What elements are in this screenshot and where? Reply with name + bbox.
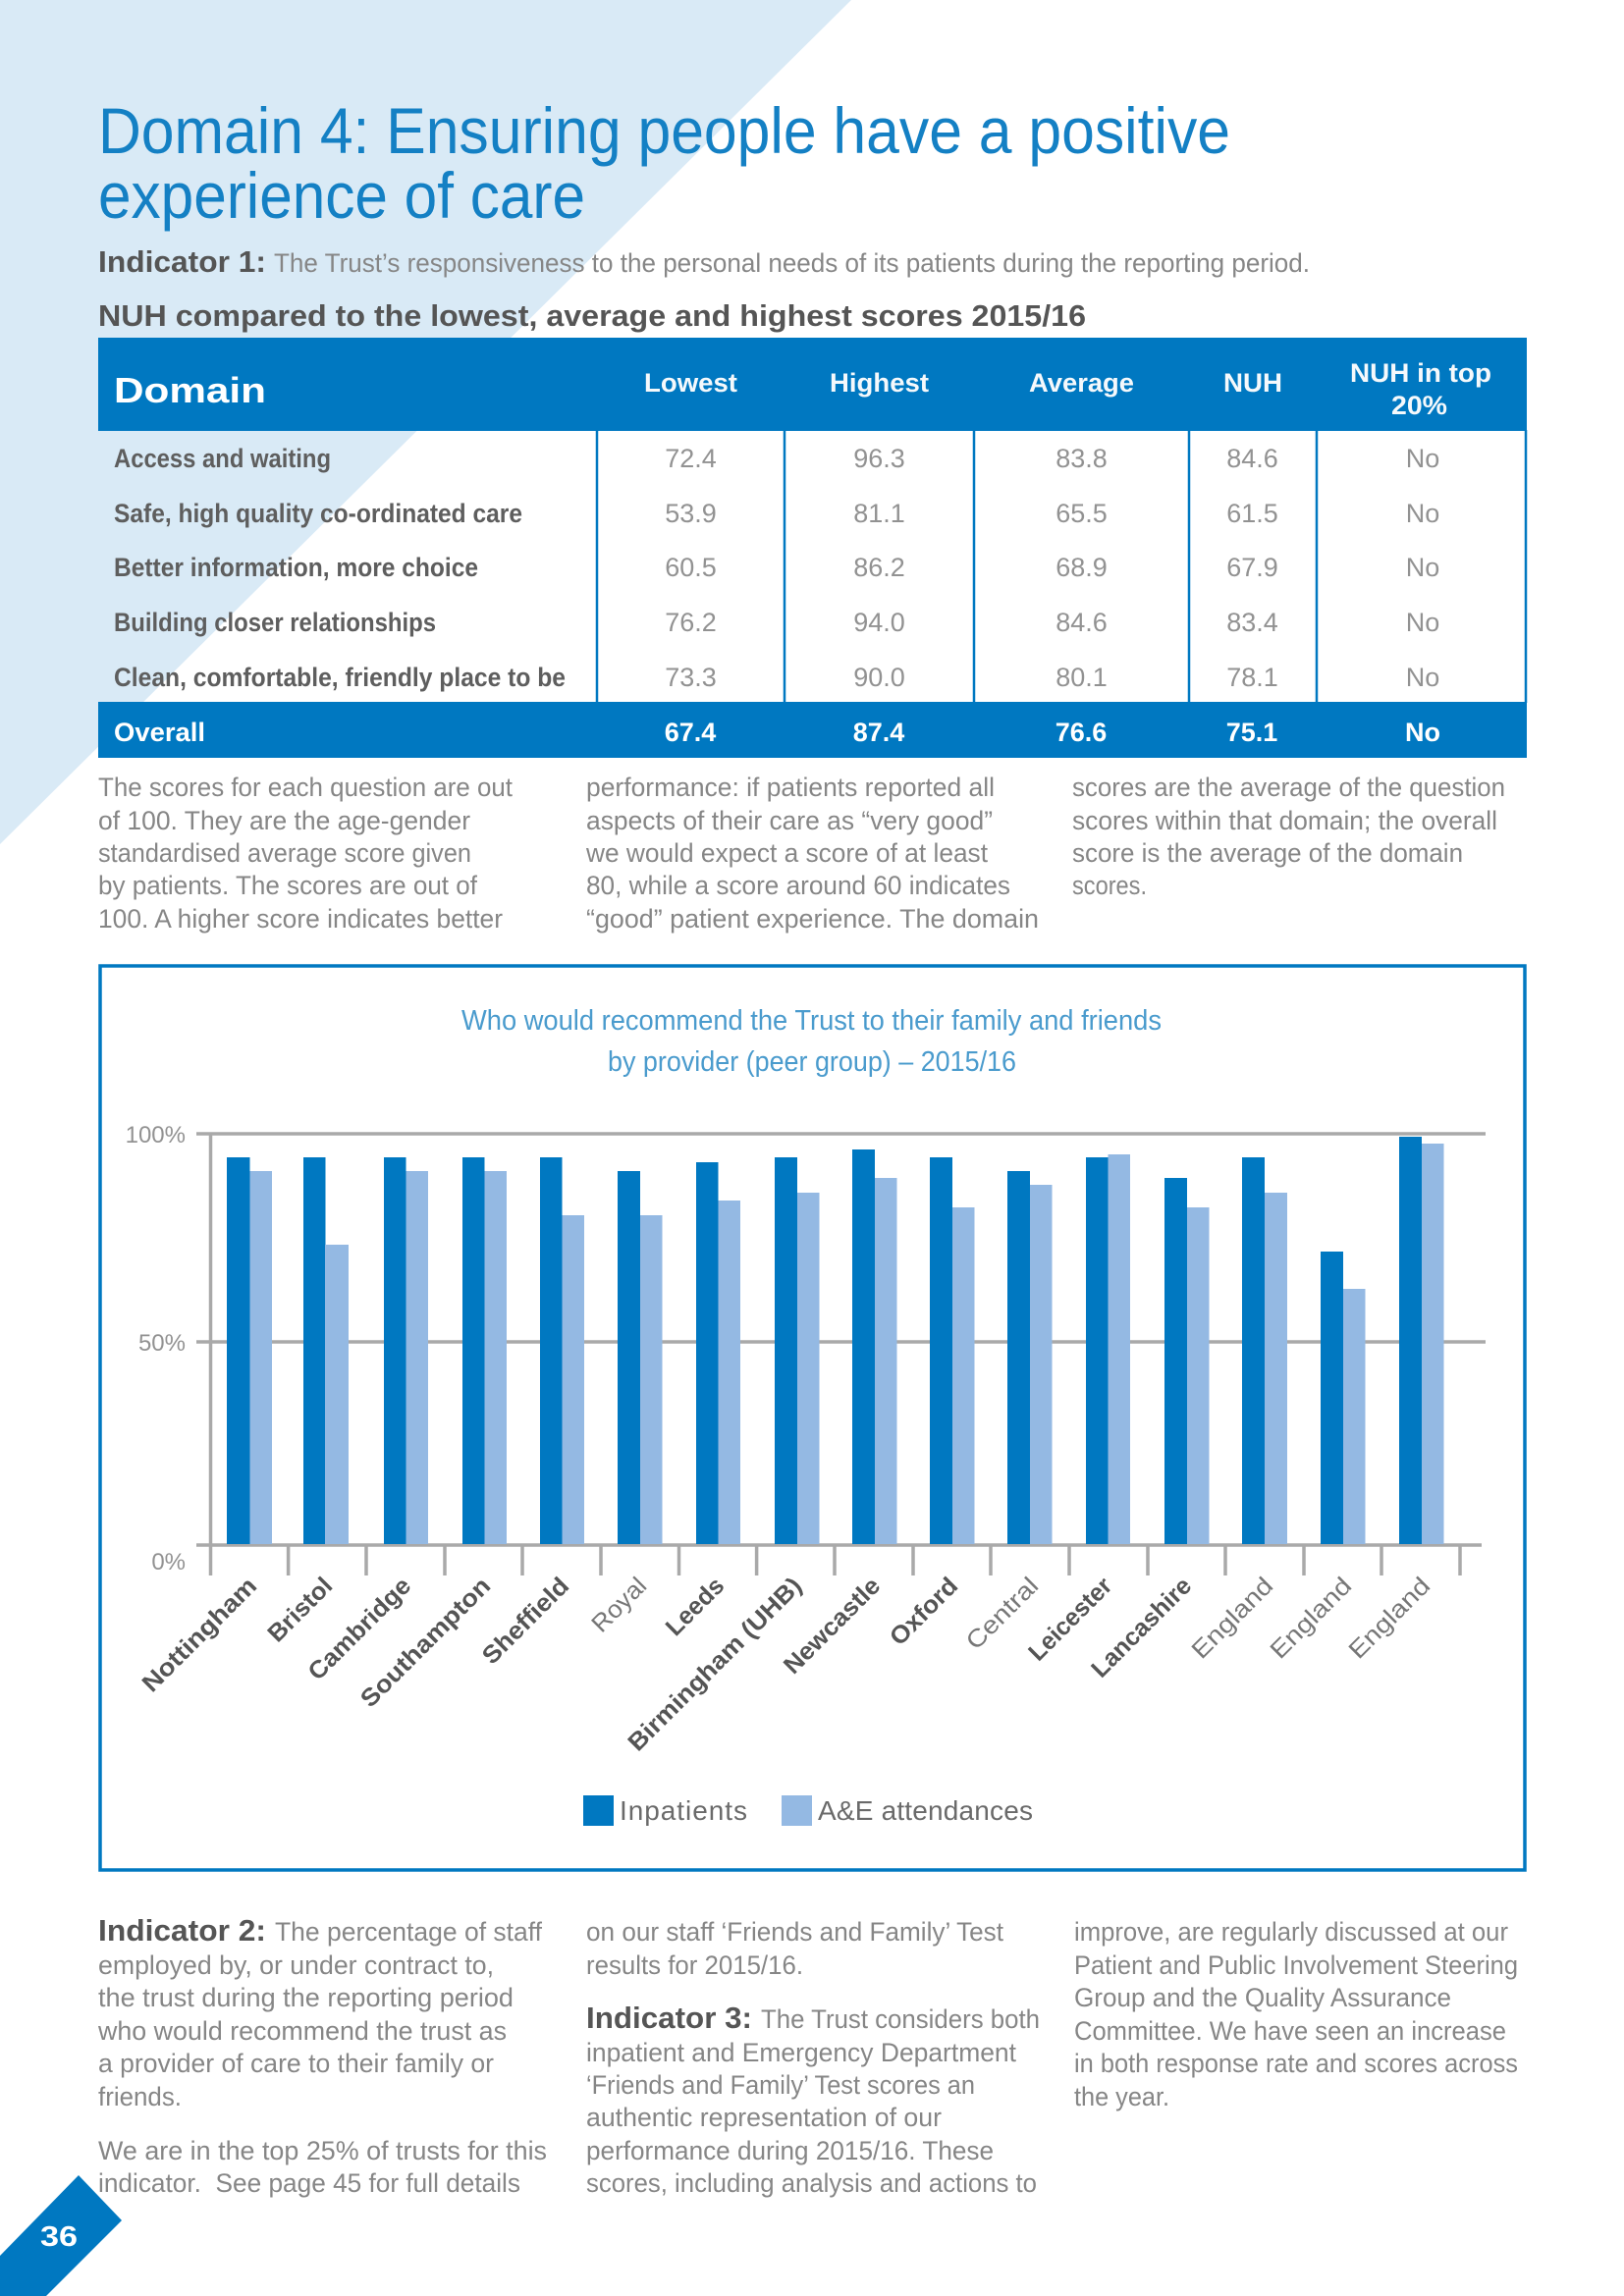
table	[98, 338, 1527, 758]
table column lines	[597, 430, 1526, 703]
table header row: 20%	[1391, 391, 1447, 420]
page number tag: 36	[40, 2221, 78, 2253]
x axis labels: Lancashire	[1086, 1572, 1197, 1683]
row: building closer relationships: 84.6	[1056, 608, 1108, 637]
table header row: Average	[1029, 368, 1134, 398]
table notes column 1: 100. A higher score indicates better	[98, 904, 503, 934]
indicator 1 text: Indicator 1:	[98, 244, 266, 279]
indicator 3 text: Indicator 3:	[586, 2001, 752, 2035]
table header row	[98, 338, 1527, 431]
row: better information: Better information, more choice	[114, 553, 478, 582]
title: Domain 4: Ensuring people have a positive	[98, 94, 1230, 167]
row: overall	[98, 702, 1527, 758]
row: building closer relationships: No	[1406, 608, 1439, 637]
row: clean, comfortable	[114, 663, 1439, 692]
x axis labels: Newcastle	[779, 1572, 886, 1680]
indicator 3 text: ‘Friends and Family’ Test scores an	[586, 2070, 975, 2100]
x axis labels: Leicester	[1023, 1572, 1117, 1667]
row: safe, high quality care: No	[1406, 499, 1439, 528]
table notes column 2: aspects of their care as “very good”	[586, 806, 993, 835]
x axis labels: Central	[960, 1572, 1044, 1655]
indicator 3 continued: Committee. We have seen an increase	[1074, 2016, 1506, 2046]
chart title	[461, 1005, 1162, 1078]
x axis labels: England	[1265, 1572, 1357, 1664]
row: access and waiting: No	[1406, 444, 1439, 473]
table notes column 1: by patients. The scores are out of	[98, 871, 477, 900]
table notes column 2: “good” patient experience. The domain	[586, 904, 1039, 934]
indicator 2 text	[97, 1913, 547, 2198]
x axis labels	[136, 1572, 1435, 1757]
indicator 3 continued: improve, are regularly discussed at our	[1074, 1917, 1508, 1947]
indicator 3 continued: in both response rate and scores across	[1074, 2049, 1518, 2078]
row: access and waiting: 96.3	[853, 444, 905, 473]
row: access and waiting: Access and waiting	[114, 444, 331, 473]
indicator 3 continued: the year.	[1074, 2082, 1169, 2111]
y axis labels: 0%	[151, 1549, 186, 1575]
x axis labels: England	[1343, 1572, 1435, 1664]
table header row: Highest	[830, 368, 929, 398]
row: better information: 86.2	[853, 553, 905, 582]
chart frame	[100, 966, 1525, 1870]
row: better information: No	[1406, 553, 1439, 582]
chart axes and gridlines	[196, 1134, 1486, 1575]
y axis labels: 100%	[126, 1122, 186, 1148]
chart title: Who would recommend the Trust to their family and friends	[461, 1005, 1162, 1037]
row: building closer relationships: 83.4	[1226, 608, 1278, 637]
row: access and waiting: 72.4	[665, 444, 717, 473]
row: safe, high quality care: 61.5	[1226, 499, 1278, 528]
indicator 2 text: indicator. See page 45 for full details	[98, 2168, 520, 2198]
table notes column 3	[1072, 773, 1505, 900]
legend	[583, 1795, 1033, 1826]
indicator 3 text: inpatient and Emergency Department	[586, 2038, 1016, 2067]
x axis labels: Bristol	[262, 1572, 338, 1648]
table notes column 2: we would expect a score of at least	[585, 838, 988, 868]
row: clean, comfortable: No	[1406, 663, 1439, 692]
row: building closer relationships: 76.2	[665, 608, 717, 637]
x axis labels: Birmingham (UHB)	[623, 1572, 807, 1757]
table notes column 2	[585, 773, 1039, 934]
row: overall: 67.4	[665, 718, 716, 747]
indicator 3 text: authentic representation of our	[586, 2103, 942, 2132]
row: safe, high quality care: 53.9	[665, 499, 717, 528]
table notes column 3: score is the average of the domain	[1072, 838, 1463, 868]
indicator 3 text: performance during 2015/16. These	[586, 2136, 994, 2165]
row: overall: No	[1405, 718, 1440, 747]
indicator 2 text: friends.	[98, 2082, 182, 2111]
x axis labels: Royal	[586, 1572, 652, 1638]
row: better information: 67.9	[1226, 553, 1278, 582]
row: building closer relationships: 94.0	[853, 608, 905, 637]
chart title: by provider (peer group) – 2015/16	[608, 1046, 1016, 1078]
indicator 2 text: the trust during the reporting period	[98, 1983, 514, 2012]
table notes column 1	[98, 773, 513, 934]
x axis labels: Oxford	[885, 1572, 963, 1651]
indicator 3 continued	[1074, 1917, 1518, 2111]
row: clean, comfortable: 80.1	[1056, 663, 1108, 692]
table heading: NUH compared to the lowest, average and highest scores 2015/16	[98, 298, 1086, 333]
indicator 2 continued: on our staff ‘Friends and Family’ Test	[586, 1917, 1003, 1947]
indicator 2 text: employed by, or under contract to,	[98, 1950, 494, 1980]
table header row: Domain	[114, 370, 266, 410]
row: safe, high quality care: 65.5	[1056, 499, 1108, 528]
row: overall: 87.4	[853, 718, 904, 747]
indicator 2 text: Indicator 2:	[98, 1913, 266, 1948]
row: access and waiting: 83.8	[1056, 444, 1108, 473]
row: clean, comfortable: 90.0	[853, 663, 905, 692]
bars: A&E attendances	[249, 1144, 1443, 1544]
title: experience of care	[98, 159, 585, 232]
row: safe, high quality care: 81.1	[853, 499, 905, 528]
row: overall: Overall	[114, 718, 205, 747]
x axis labels: England	[1186, 1572, 1278, 1664]
row: building closer relationships: Building closer relationships	[114, 608, 436, 637]
indicator 3 text	[586, 2001, 1040, 2198]
row: better information: 68.9	[1056, 553, 1108, 582]
indicator 2 text: a provider of care to their family or	[98, 2049, 494, 2078]
title	[98, 94, 1230, 232]
indicator 3 text: scores, including analysis and actions to	[586, 2168, 1037, 2198]
indicator 2 text: We are in the top 25% of trusts for this	[98, 2136, 547, 2165]
table notes column 3: scores are the average of the question	[1072, 773, 1505, 802]
indicator 2 continued	[586, 1917, 1003, 1980]
indicator 2 continued: results for 2015/16.	[586, 1950, 803, 1980]
x axis labels: Southampton	[355, 1572, 496, 1713]
table notes column 1: of 100. They are the age-gender	[98, 806, 470, 835]
row: overall: 76.6	[1056, 718, 1107, 747]
row: safe, high quality care: Safe, high quality co-ordinated care	[114, 499, 522, 528]
y axis labels	[126, 1122, 186, 1575]
row: better information: 60.5	[665, 553, 717, 582]
row: overall: 75.1	[1226, 718, 1277, 747]
table notes column 3: scores within that domain; the overall	[1072, 806, 1497, 835]
legend: Inpatients	[620, 1795, 747, 1826]
indicator 3 continued: Patient and Public Involvement Steering	[1074, 1950, 1518, 1980]
y axis labels: 50%	[138, 1330, 186, 1357]
x axis labels: Cambridge	[302, 1572, 416, 1685]
bars: Inpatients	[227, 1137, 1422, 1544]
table header row: Lowest	[644, 368, 737, 398]
panel: chart	[100, 966, 1525, 1870]
table header row: NUH in top	[1350, 358, 1491, 388]
x axis labels: Nottingham	[136, 1572, 262, 1697]
row: better information	[114, 553, 1439, 582]
legend: A&E attendances	[818, 1795, 1033, 1826]
x axis labels: Sheffield	[477, 1572, 574, 1670]
x axis labels: Leeds	[661, 1572, 730, 1641]
table notes column 2: 80, while a score around 60 indicates	[586, 871, 1010, 900]
row: clean, comfortable: 78.1	[1226, 663, 1278, 692]
indicator 2 text: The percentage of staff	[275, 1917, 542, 1947]
table notes column 3: scores.	[1072, 871, 1147, 900]
indicator 2 text: who would recommend the trust as	[97, 2016, 507, 2046]
background light blue triangle	[0, 0, 851, 844]
row: access and waiting	[114, 444, 1439, 473]
row: safe, high quality care	[114, 499, 1439, 528]
indicator 3 text: The Trust considers both	[761, 2004, 1040, 2034]
table notes column 1: The scores for each question are out	[98, 773, 513, 802]
row: clean, comfortable: 73.3	[665, 663, 717, 692]
row: building closer relationships	[114, 608, 1439, 637]
page number tag	[0, 2175, 122, 2296]
table header row: NUH	[1223, 368, 1282, 398]
table notes column 2: performance: if patients reported all	[586, 773, 995, 802]
indicator 1 text: The Trust’s responsiveness to the personal needs of its patients during the reporting period.	[274, 248, 1310, 278]
row: access and waiting: 84.6	[1226, 444, 1278, 473]
table notes column 1: standardised average score given	[98, 838, 471, 868]
row: clean, comfortable: Clean, comfortable, friendly place to be	[114, 663, 566, 692]
indicator 3 continued: Group and the Quality Assurance	[1074, 1983, 1451, 2012]
